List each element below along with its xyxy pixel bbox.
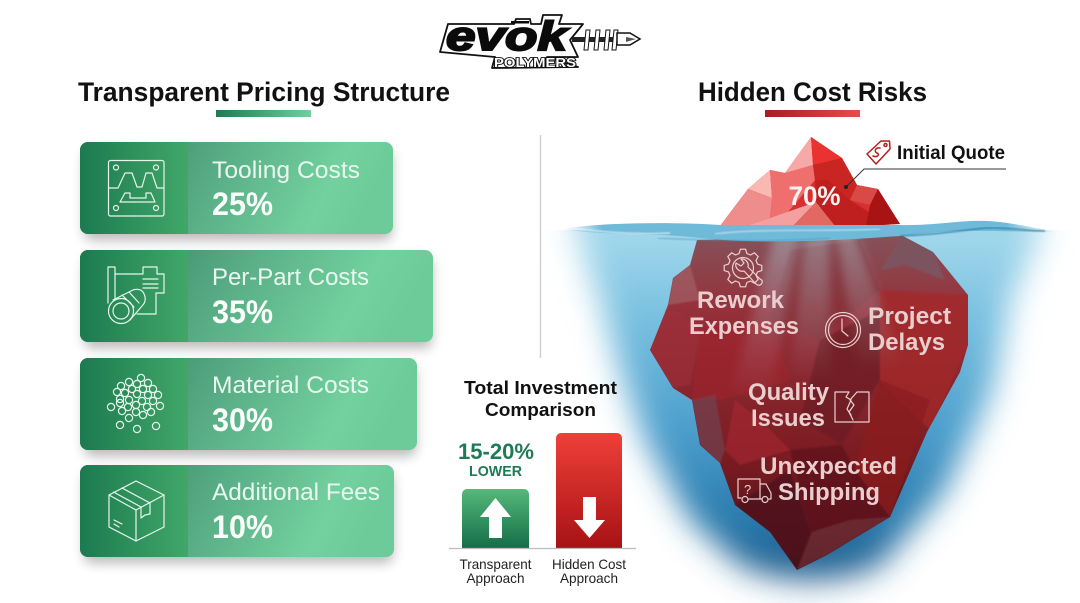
- label: Per-Part Costs: Per-Part Costs: [212, 264, 369, 291]
- bar: hidden cost approach: [556, 433, 622, 548]
- label: Initial Quote: Initial Quote: [897, 142, 1005, 164]
- panel: Material Costs card: [80, 358, 417, 456]
- logo: Evok Polymers: [440, 13, 640, 70]
- icon: delivery truck with question mark: [738, 479, 771, 502]
- comparison title: Total Investment: [464, 377, 617, 398]
- icon: cardboard box: [109, 481, 164, 541]
- label: hidden cost approach: Approach: [560, 570, 618, 586]
- icon: mold tool: [108, 160, 164, 216]
- callout: 15-20% lower: [458, 439, 534, 480]
- icon: delivery truck with question mark: ?: [744, 482, 751, 497]
- logo screw: [572, 30, 640, 50]
- value: 70%: 70%: [788, 181, 840, 211]
- risk: Unexpected Shipping: Unexpected: [760, 453, 897, 480]
- icon: cracked part: [835, 392, 869, 422]
- callout: 15-20% lower: LOWER: [469, 463, 522, 480]
- iceberg underwater: [650, 232, 968, 570]
- label: hidden cost approach: Hidden Cost: [552, 556, 626, 572]
- risk: Project Delays: Delays: [868, 329, 945, 356]
- icon: machined part on blueprint: [108, 267, 164, 324]
- heading: Transparent Pricing Structure: Transparent Pricing Structure: [78, 77, 450, 107]
- risk: Rework Expenses: Expenses: [689, 313, 799, 340]
- panel: Per-Part Costs card: [80, 250, 433, 348]
- value: 30%: 30%: [212, 402, 273, 438]
- risk: Quality Issues: Quality: [748, 379, 830, 406]
- leader line: [844, 169, 1006, 189]
- panel: Total Investment Comparison: [449, 377, 636, 586]
- callout: 15-20% lower: 15-20%: [458, 439, 534, 464]
- risk: Quality Issues: Issues: [751, 405, 825, 432]
- risk: Unexpected Shipping: Shipping: [778, 479, 880, 506]
- risk: Project Delays: [826, 303, 951, 356]
- logo: Evok Polymers: POLYMERS: [494, 56, 576, 70]
- iceberg tip: [720, 137, 900, 226]
- icon: gear and wrench: [724, 249, 762, 287]
- risk: Unexpected Shipping: [738, 453, 897, 506]
- light rays: [740, 238, 893, 380]
- label: transparent approach: [460, 556, 532, 586]
- value: 35%: 35%: [212, 294, 273, 330]
- value: 25%: 25%: [212, 186, 273, 222]
- icon: price tag: [867, 141, 890, 164]
- risk: Quality Issues: [748, 379, 869, 432]
- panel: Tooling Costs card: [80, 142, 393, 240]
- value: 10%: 10%: [212, 509, 273, 545]
- heading: Hidden Cost Risks: Hidden Cost Risks: [698, 77, 927, 107]
- label: Material Costs: Material Costs: [212, 372, 369, 399]
- callout: Initial Quote: [844, 141, 1006, 189]
- icon: down arrow: [574, 497, 605, 538]
- label: transparent approach: Transparent: [460, 556, 532, 572]
- risk: Rework Expenses: [689, 249, 799, 340]
- risk: Rework Expenses: Rework: [697, 287, 785, 314]
- comparison title: Comparison: [485, 399, 596, 420]
- water body: [570, 190, 1045, 580]
- label: hidden cost approach: [552, 556, 626, 586]
- icon: material pellets: [107, 374, 164, 433]
- icon: clock: [826, 312, 860, 348]
- label: Additional Fees: Additional Fees: [212, 479, 380, 506]
- iceberg: [650, 137, 968, 570]
- bar: transparent approach: [462, 489, 529, 548]
- label: transparent approach: Approach: [466, 570, 524, 586]
- label: Tooling Costs: Tooling Costs: [212, 157, 360, 184]
- panel: Additional Fees card: [80, 465, 394, 563]
- comparison title: [464, 377, 617, 420]
- logo: Evok Polymers: evok: [446, 13, 570, 59]
- risk: Project Delays: Project: [868, 303, 951, 330]
- icon: up arrow: [480, 498, 511, 538]
- water surface waves: [563, 221, 1055, 241]
